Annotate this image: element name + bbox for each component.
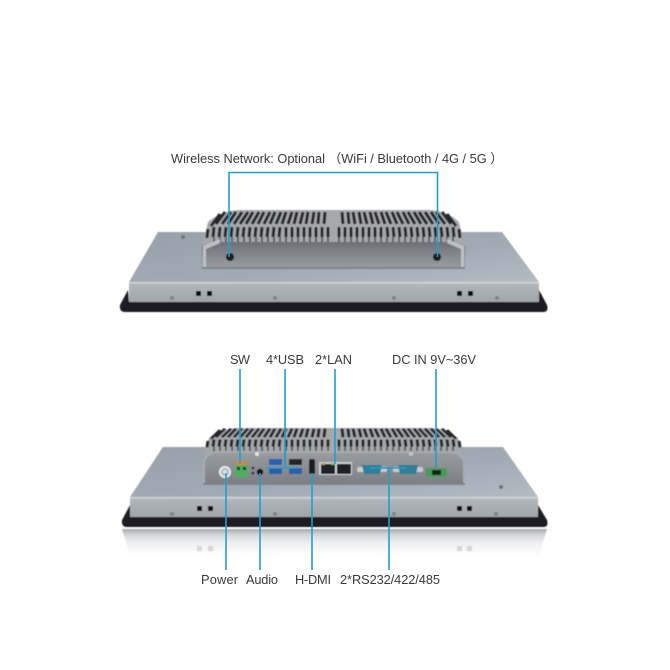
callout: LAN line: [334, 369, 336, 464]
reflected slots: [197, 546, 472, 551]
callout: SW line: [239, 369, 241, 463]
label: USB: 4*USB: [266, 352, 304, 367]
screws and slots: [170, 235, 499, 300]
icon: power button: [220, 466, 230, 478]
port: HDMI: [309, 459, 315, 474]
highlight corners: [203, 239, 464, 267]
ports: USB: [269, 459, 302, 474]
heatsink fins: [203, 210, 464, 244]
ports: LAN: [319, 462, 352, 475]
antenna holes: [226, 253, 441, 261]
port: audio: [257, 469, 263, 475]
callout: power line: [225, 473, 227, 570]
port: DC in: [426, 468, 447, 477]
callout: antenna bracket: [229, 172, 438, 257]
panel: top device rear view: [120, 210, 547, 312]
back plate: [129, 232, 539, 282]
side face: [130, 497, 538, 517]
callout: audio line: [259, 473, 261, 570]
front bezel: [120, 290, 547, 312]
port: SW terminal: [235, 461, 248, 477]
label: LAN: 2*LAN: [315, 352, 352, 367]
side face: [129, 282, 539, 302]
panel: bottom device rear view: [122, 428, 547, 556]
callout: RS232 lines: [370, 468, 407, 570]
indicator lights: [252, 467, 254, 474]
heading: wireless network: Wireless Network: Optional （WiFi / Bluetooth / 4G / 5G ）: [171, 151, 503, 166]
back plate: [130, 447, 538, 497]
label: HDMI: H-DMI: [295, 572, 331, 587]
label: SW: SW: [230, 352, 251, 367]
callout: HDMI line: [311, 473, 313, 570]
callout: DC line: [435, 369, 437, 468]
reflection: [122, 529, 547, 556]
callout: USB lines: [266, 369, 298, 468]
front bezel: [122, 505, 547, 527]
ports: RS232: [357, 465, 423, 474]
label: DC in: DC IN 9V~36V: [392, 352, 476, 367]
label: Power: Power: [201, 572, 239, 587]
label: Audio: Audio: [246, 572, 278, 587]
heatsink fins: [204, 428, 463, 454]
I/O plate: [203, 451, 465, 483]
label: RS232: 2*RS232/422/485: [340, 572, 440, 587]
screws and slots: [170, 452, 503, 516]
heatsink base: [202, 242, 465, 268]
